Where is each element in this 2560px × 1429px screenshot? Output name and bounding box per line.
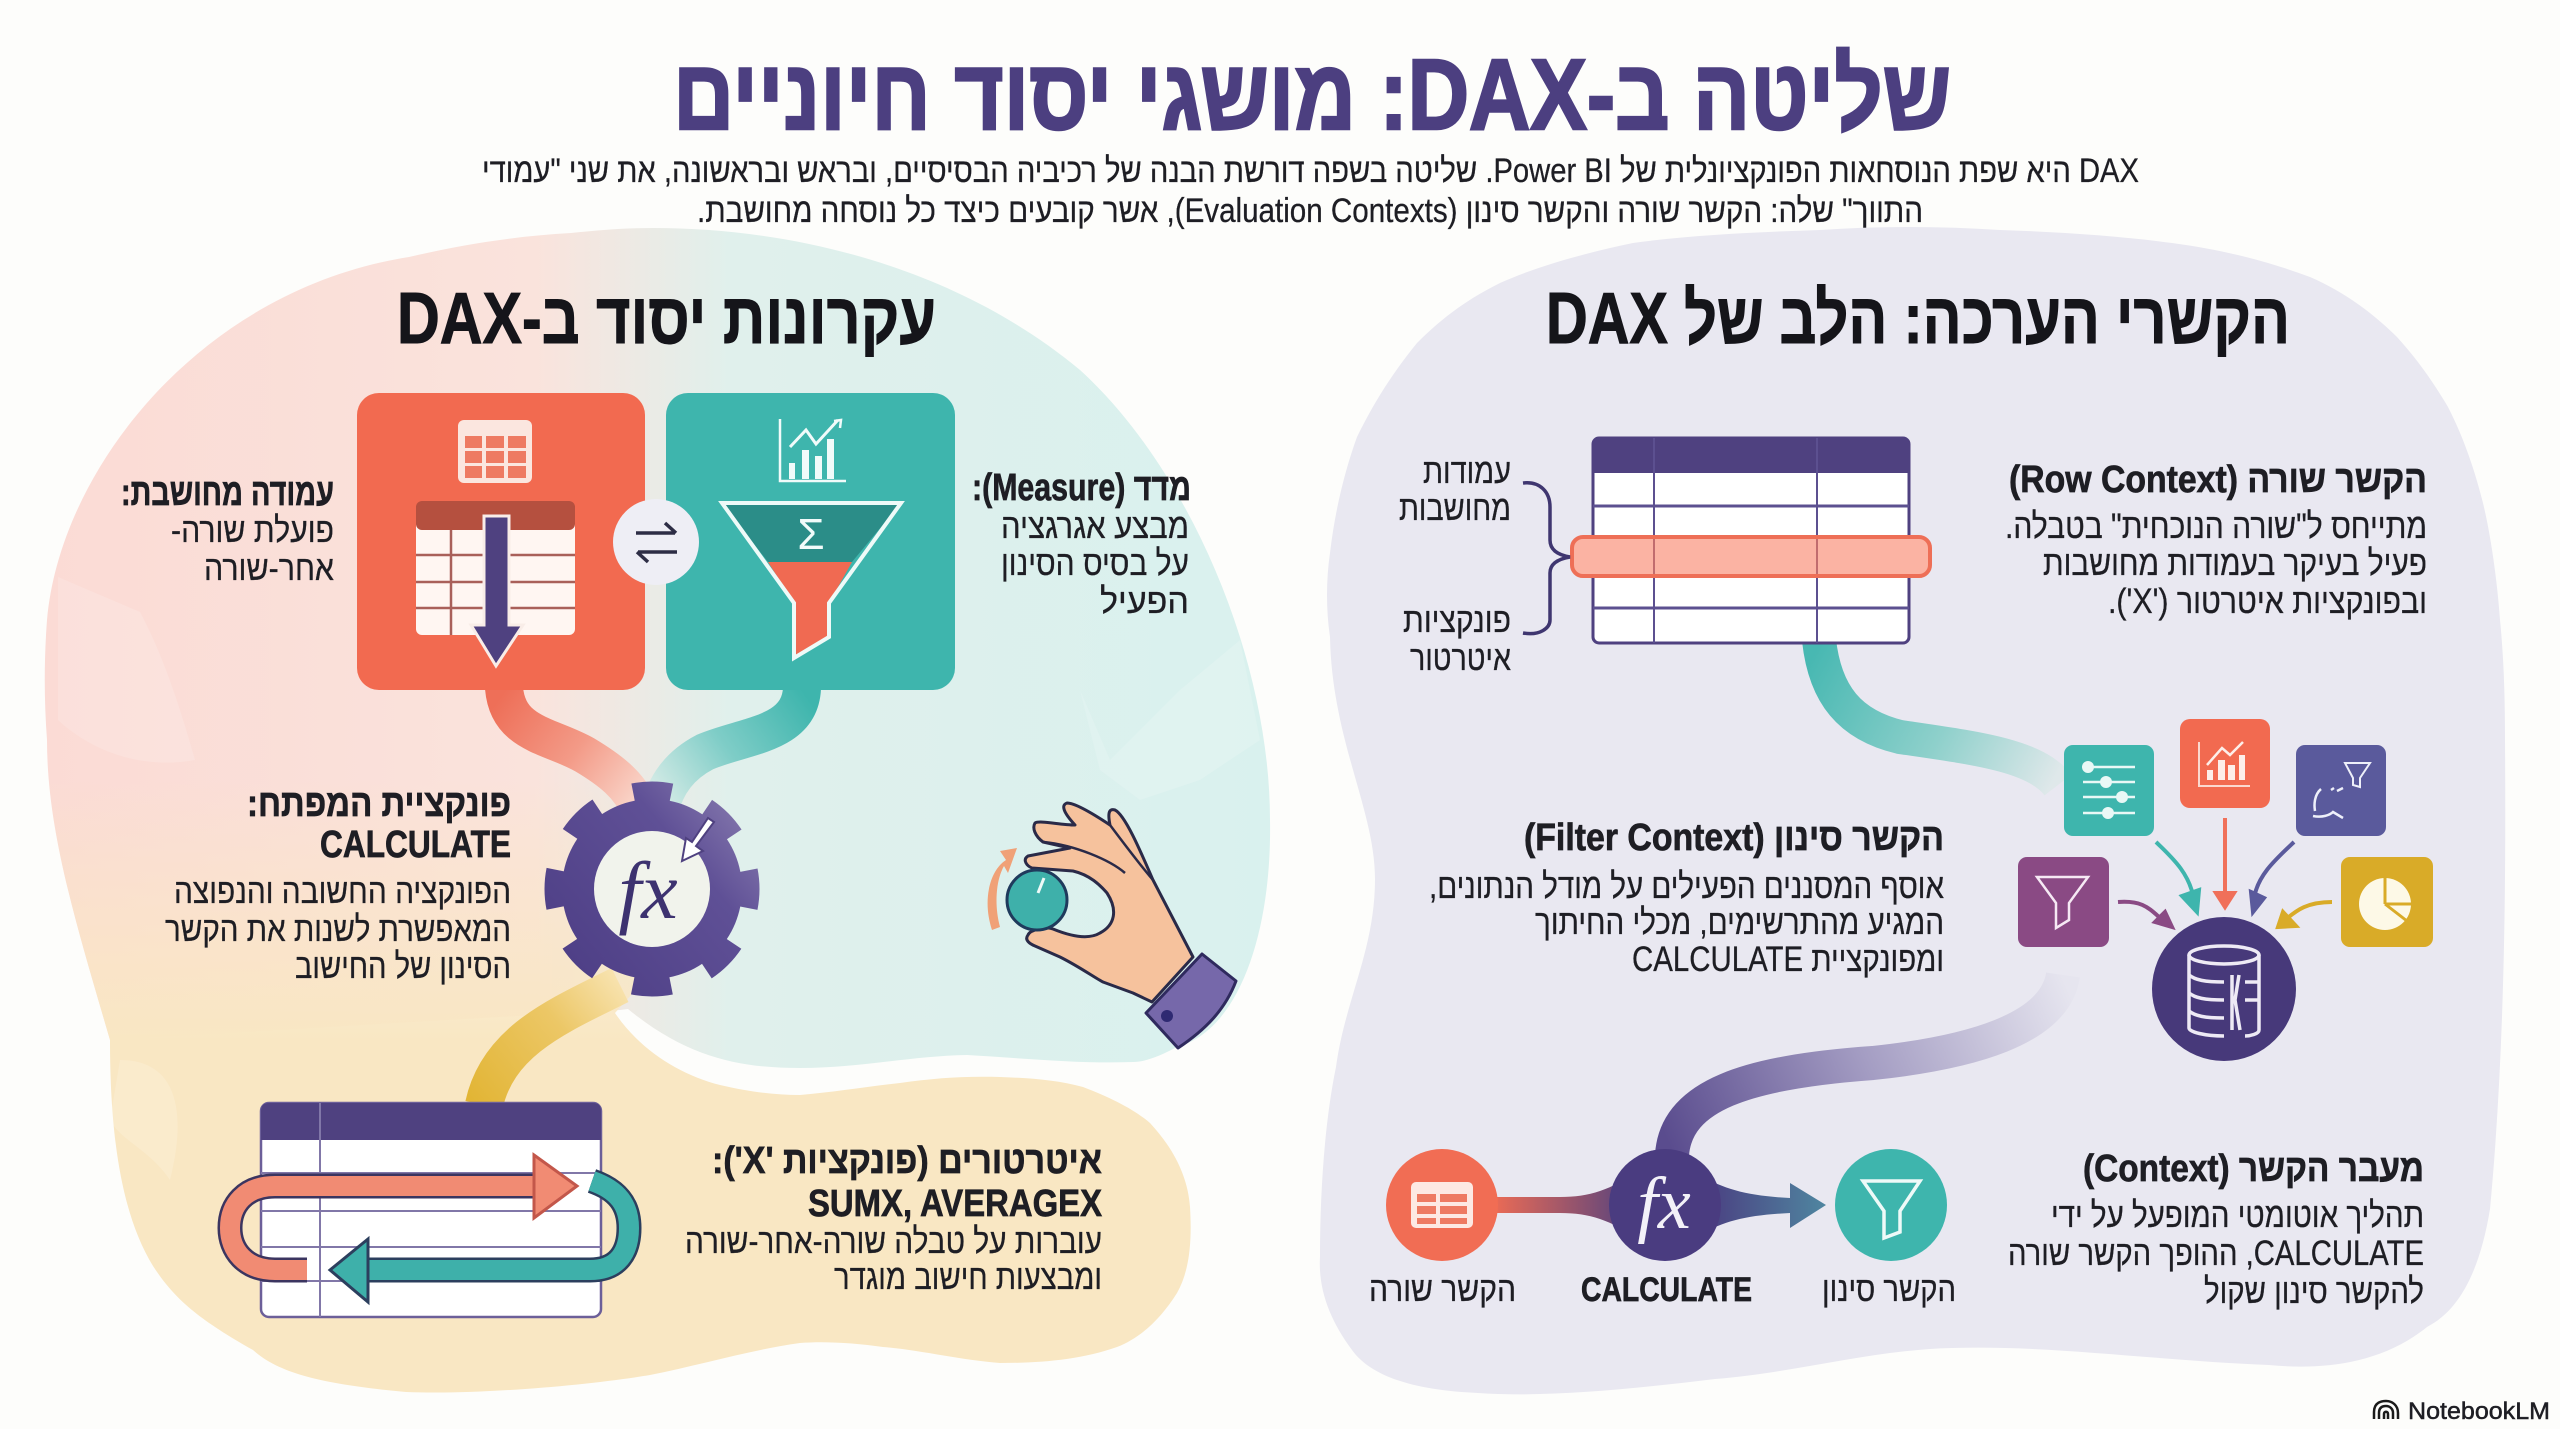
text: iterators: עוברות על טבלה שורה-אחר-שורה xyxy=(685,1222,1102,1261)
bracket labels: איטרטור xyxy=(1410,639,1511,678)
icon: funnel card xyxy=(2018,857,2109,947)
icon: sliders card xyxy=(2064,745,2154,836)
text: iterators: איטרטורים (פונקציות 'X'): xyxy=(712,1140,1102,1182)
icon: visual filter card xyxy=(2296,745,2386,836)
title: שליטה ב-DAX: מושגי יסוד חיוניים xyxy=(673,39,1951,151)
sleeve xyxy=(1146,954,1236,1048)
text: filter context: המגיע מהתרשימים, מכלי החיתוך xyxy=(1535,903,1944,942)
text: context transition xyxy=(2008,1148,2424,1311)
ribbon: gear to iterator table xyxy=(484,985,620,1105)
arrows: filter sources into model xyxy=(2118,818,2332,927)
flow: context transition xyxy=(1369,1149,1956,1309)
dial xyxy=(1007,870,1067,930)
ribbon: teal card to gear xyxy=(660,688,802,810)
text: row context: הקשר שורה (Row Context) xyxy=(2009,459,2427,501)
node labels: CALCULATE xyxy=(1581,1271,1752,1309)
text: measure xyxy=(972,467,1191,621)
node: calculate fx xyxy=(1609,1149,1721,1261)
text: measure: הפעיל xyxy=(1100,582,1189,621)
text: row context: ובפונקציות איטרטור ('X'). xyxy=(2108,582,2427,621)
icon: gear with fx xyxy=(555,792,749,986)
text: row context: פעיל בעיקר בעמודות מחושבות xyxy=(2043,544,2427,583)
icon: chart xyxy=(780,419,846,481)
icon: small table xyxy=(458,420,532,483)
card: calculated column xyxy=(357,393,645,690)
bracket labels: פונקציות xyxy=(1403,601,1511,640)
text: key function: הסינון של החישוב xyxy=(295,947,511,986)
arrow: coral loop xyxy=(230,1155,577,1270)
text: calculated column: אחר-שורה xyxy=(204,549,334,588)
panel background: pink and teal blob xyxy=(45,228,1270,1068)
text: filter context: ומפונקציית CALCULATE xyxy=(1632,940,1944,979)
icon: chart card xyxy=(2180,719,2270,808)
table: row context xyxy=(1572,438,1930,643)
node labels: הקשר סינון xyxy=(1822,1270,1956,1309)
hand xyxy=(1025,803,1193,1002)
text: row context xyxy=(2005,459,2427,621)
ribbon: table to filter sources xyxy=(1819,640,2058,785)
text: context transition: להקשר סינון שקול xyxy=(2204,1272,2424,1311)
icon: data model database xyxy=(2152,917,2296,1061)
card: measure xyxy=(666,393,955,690)
decorative faint leaves xyxy=(58,577,1260,1180)
heading: core principles: עקרונות יסוד ב-DAX xyxy=(397,279,936,359)
text: calculated column: פועלת שורה- xyxy=(171,511,334,550)
arrow: teal loop xyxy=(330,1181,629,1302)
icon: table with down arrow xyxy=(416,501,575,666)
text: measure: על בסיס הסינון xyxy=(1001,544,1189,583)
panel: DAX core principles xyxy=(44,228,1270,1393)
text: filter context xyxy=(1429,817,1944,979)
text: context transition: תהליך אוטומטי המופעל על ידי xyxy=(2051,1196,2424,1235)
heading: evaluation contexts: הקשרי הערכה: הלב של DAX xyxy=(1546,279,2290,359)
ribbon: coral card to gear xyxy=(504,688,640,810)
icon: funnel with sigma xyxy=(722,503,901,658)
text: key function: המאפשרת לשנות את הקשר xyxy=(165,910,511,949)
icon: funnel with sigma: Σ xyxy=(797,510,825,559)
text: filter context: הקשר סינון (Filter Context) xyxy=(1524,817,1944,859)
text: filter context: אוסף המסננים הפעילים על מודל הנתונים, xyxy=(1429,867,1944,906)
icon: swap arrows xyxy=(613,499,699,585)
connector: calculate to filter xyxy=(1700,1175,1826,1235)
text: iterators: ומבצעות חישוב מוגדר xyxy=(834,1258,1102,1297)
panel: evaluation contexts xyxy=(1320,227,2505,1394)
text: measure: מדד (Measure): xyxy=(972,467,1191,509)
bracket labels xyxy=(1399,452,1511,678)
connector: row to calculate xyxy=(1490,1170,1640,1240)
text: key function: CALCULATE xyxy=(320,824,511,866)
curved arrow xyxy=(988,848,1017,930)
text: iterators: SUMX, AVERAGEX xyxy=(808,1183,1103,1225)
text: calculated column xyxy=(121,472,334,588)
text: row context: מתייחס ל"שורה הנוכחית" בטבלה. xyxy=(2005,507,2427,546)
intro paragraph: התווך" שלה: הקשר שורה והקשר סינון (Evaluation Contexts), אשר קובעים כיצד כל נוסחה מחושבת. xyxy=(697,192,1923,230)
bracket xyxy=(1523,483,1570,634)
panel background: yellow blob xyxy=(44,686,1191,1393)
icon: pie chart card xyxy=(2341,857,2433,947)
intro paragraph: DAX היא שפת הנוסחאות הפונקציונלית של Power BI. שליטה בשפה דורשת הבנה של רכיביה הבסיסיים, ובראש ובראשונה, את שני "עמודי xyxy=(482,152,2139,190)
icon: iterator table with loop arrows xyxy=(230,1103,629,1317)
node labels xyxy=(1369,1270,1956,1309)
node: calculate fx: fx xyxy=(1637,1163,1691,1245)
text: calculated column: עמודה מחושבת: xyxy=(121,472,334,514)
logo: NotebookLM: NotebookLM xyxy=(2408,1398,2550,1425)
intro paragraph xyxy=(482,152,2139,230)
text: measure: מבצע אגרגציה xyxy=(1001,507,1189,546)
text: context transition: מעבר הקשר (Context) xyxy=(2083,1148,2424,1190)
panel background: lavender blob xyxy=(1320,227,2505,1394)
highlighted row xyxy=(1572,537,1930,576)
text: iterators xyxy=(685,1140,1103,1297)
text: key function: פונקציית המפתח: xyxy=(247,783,511,825)
text: key function: הפונקציה החשובה והנפוצה xyxy=(174,872,511,911)
node: row context xyxy=(1386,1149,1498,1261)
bracket labels: עמודות xyxy=(1423,452,1511,491)
bracket labels: מחושבות xyxy=(1399,489,1511,528)
ribbon: filter context to calculate xyxy=(1672,975,2063,1155)
text: context transition: CALCULATE, ההופך הקשר שורה xyxy=(2008,1234,2424,1273)
node labels: הקשר שורה xyxy=(1369,1270,1516,1309)
node: filter context xyxy=(1835,1149,1947,1261)
icon: notebook arcs xyxy=(2374,1401,2398,1419)
icon: hand turning dial xyxy=(988,803,1236,1048)
text: key function xyxy=(165,783,511,986)
icon: gear with fx: fx xyxy=(618,845,678,936)
